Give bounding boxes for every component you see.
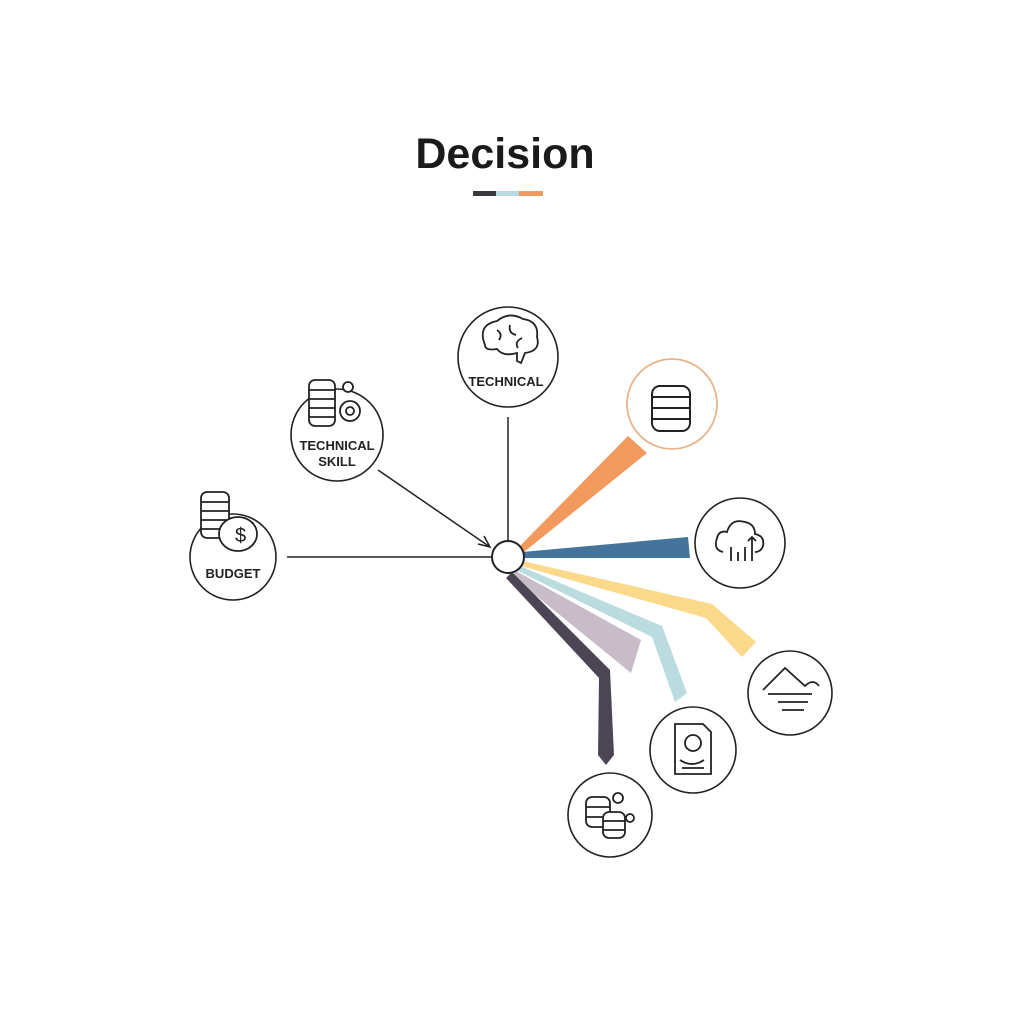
center node <box>492 541 524 573</box>
icon: database <box>652 386 690 431</box>
ribbon: dark <box>506 572 614 765</box>
node: technical: TECHNICAL <box>468 374 544 389</box>
icon: database gears <box>309 380 360 426</box>
ribbon: light blue <box>518 566 687 702</box>
node: technical skill: TECHNICAL <box>299 438 375 453</box>
node: technical skill: SKILL <box>318 454 356 469</box>
ribbon: orange <box>518 436 647 552</box>
ribbon: blue <box>522 537 690 558</box>
ribbon: yellow <box>521 561 756 657</box>
node: cloud analytics <box>695 498 785 588</box>
node: document <box>650 707 736 793</box>
icon: databases and gears <box>586 793 634 838</box>
node: database gears <box>568 773 652 857</box>
node: technical skill <box>291 380 383 481</box>
icon: coins piggy bank: $ <box>235 525 246 547</box>
title: Decision <box>415 130 595 178</box>
ribbon: mauve <box>512 571 641 673</box>
node: database (highlighted) <box>627 359 717 449</box>
icon: brain <box>483 315 538 363</box>
node: technical <box>458 307 558 407</box>
input lines <box>287 417 508 557</box>
node: budget <box>190 492 276 600</box>
node: budget: BUDGET <box>206 566 261 581</box>
icon: mountains <box>763 668 819 710</box>
title underline colour bar <box>473 191 543 196</box>
icon: cloud chart <box>716 521 763 561</box>
node: landscape <box>748 651 832 735</box>
icon: document <box>675 724 711 774</box>
